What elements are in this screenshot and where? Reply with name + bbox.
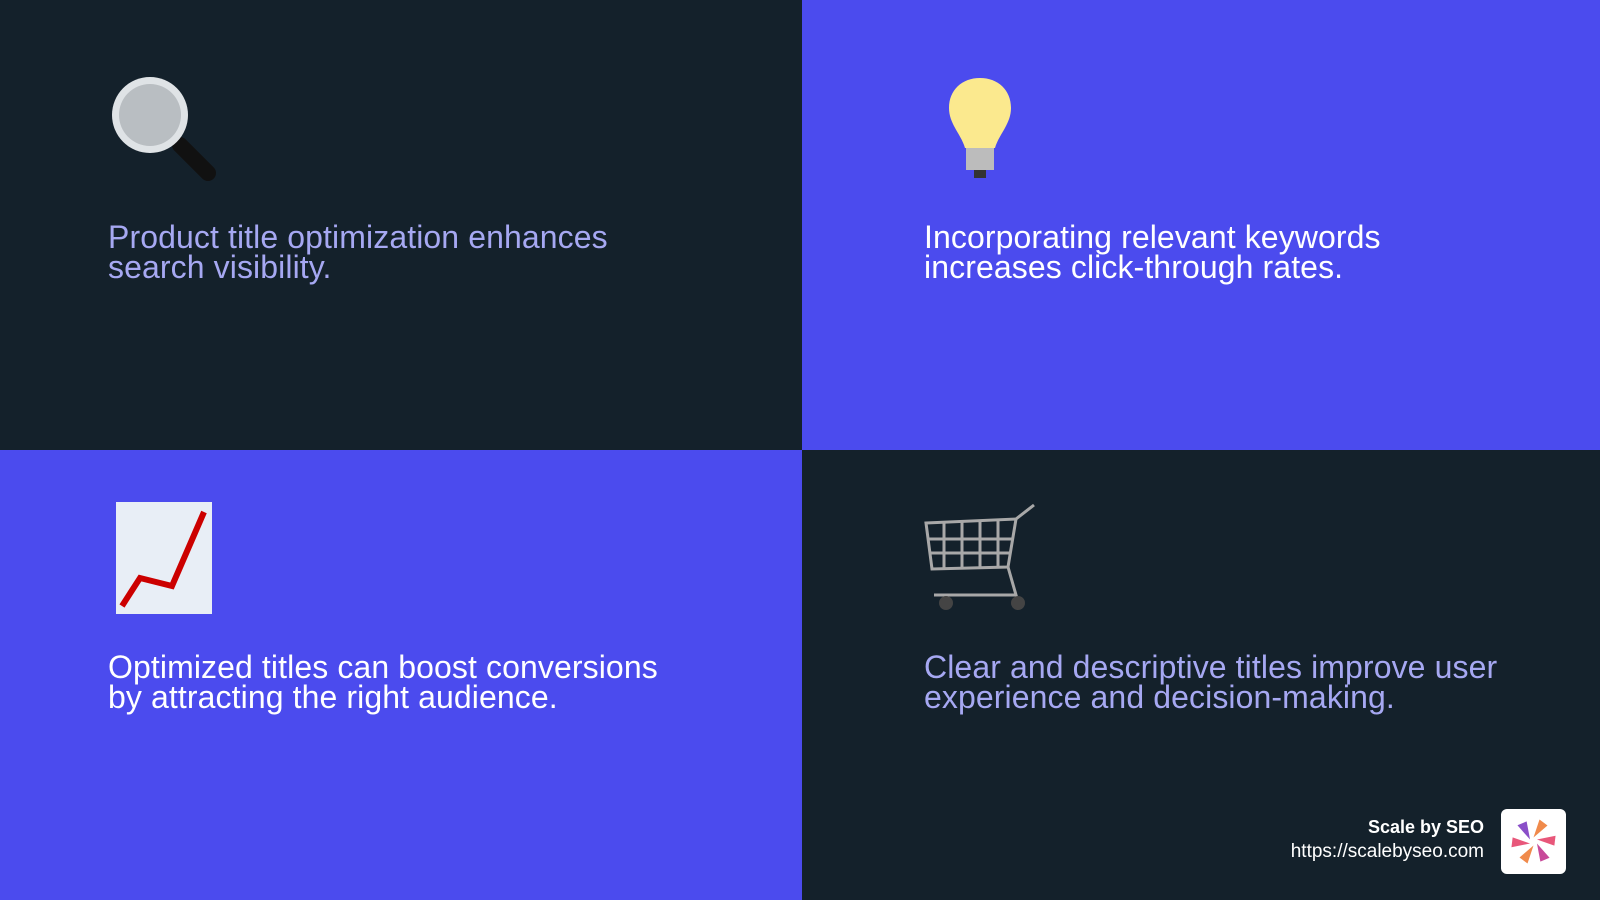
panel: top-right [802, 0, 1600, 450]
icon: shopping cart [924, 504, 1035, 610]
text: user experience [924, 649, 1497, 715]
text: conversions: by attracting the right audience. [108, 679, 558, 715]
brand text: Scale by SEO [1368, 817, 1484, 837]
text: conversions [108, 649, 658, 715]
text: keywords [924, 219, 1381, 285]
panel: bottom-left [0, 450, 802, 900]
text: visibility: search visibility. [108, 249, 332, 285]
text: keywords: Incorporating relevant keywords [924, 219, 1381, 255]
icon: light bulb [949, 78, 1011, 178]
text: visibility [108, 219, 608, 285]
icon: magnifier [112, 77, 216, 181]
panel: bottom-right [802, 450, 1600, 900]
brand text [1291, 817, 1484, 862]
text: visibility: Product title optimization enhances [108, 219, 608, 255]
text: conversions: Optimized titles can boost conversions [108, 649, 658, 685]
logo [1501, 809, 1566, 874]
icon: chart [116, 502, 212, 614]
text: user experience: experience and decision-making. [924, 679, 1395, 715]
panel: top-left [0, 0, 802, 450]
brand text: https://scalebyseo.com [1291, 841, 1484, 862]
text: keywords: increases click-through rates. [924, 249, 1343, 285]
text: user experience: Clear and descriptive titles improve user [924, 649, 1497, 685]
